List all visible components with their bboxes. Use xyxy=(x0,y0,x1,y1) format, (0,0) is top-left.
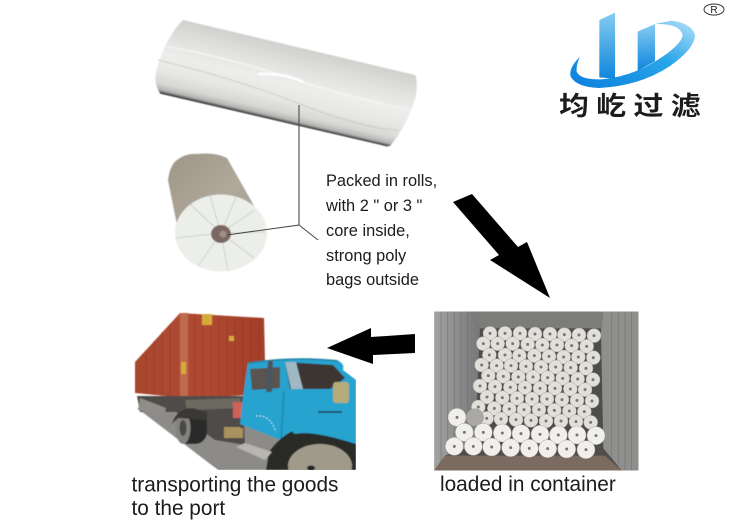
blue truck cab xyxy=(240,359,356,443)
ground xyxy=(137,408,280,470)
ceiling xyxy=(470,312,603,328)
logo mark xyxy=(570,13,695,88)
right wall xyxy=(601,312,638,470)
face pleats xyxy=(176,196,266,271)
registered mark: R xyxy=(710,5,718,16)
door pillar xyxy=(266,361,273,392)
mirror xyxy=(333,382,349,403)
wall ribs xyxy=(441,312,632,470)
company logo xyxy=(559,4,724,123)
rear wheels xyxy=(172,408,207,444)
packing description text: with 2 " or 3 " xyxy=(325,197,423,215)
windscreen xyxy=(285,362,345,389)
roll body xyxy=(168,154,262,262)
stacked rolls xyxy=(445,326,605,459)
container loading photo xyxy=(434,312,638,470)
truck caption: transporting the goods xyxy=(132,474,338,496)
side window xyxy=(250,367,280,390)
fender and wheel arch xyxy=(266,429,356,470)
trailer frame xyxy=(137,396,245,445)
registered mark xyxy=(704,4,724,16)
truck caption xyxy=(132,474,338,520)
cab step xyxy=(236,443,272,460)
logo Chinese name: 均屹过滤 xyxy=(559,86,708,123)
packing description text: strong poly xyxy=(326,247,407,265)
truck photo xyxy=(135,313,356,488)
left wall xyxy=(434,312,480,470)
container interior xyxy=(434,312,638,470)
arrow: container to truck xyxy=(327,328,415,364)
packing description text: bags outside xyxy=(326,271,419,289)
packing description text xyxy=(325,172,437,289)
red shipping container xyxy=(135,313,265,398)
roll end face xyxy=(175,194,267,272)
front wheel xyxy=(287,443,353,470)
container ribs xyxy=(146,314,244,396)
container caption: loaded in container xyxy=(440,473,616,496)
arrow: rolls to container xyxy=(453,194,550,298)
roll core xyxy=(211,225,231,243)
packing description text: Packed in rolls, xyxy=(326,172,437,190)
cab roof edge xyxy=(249,359,338,363)
door lines xyxy=(281,391,284,441)
leader lines xyxy=(227,105,318,240)
roll cores xyxy=(454,333,596,450)
packing description text: core inside, xyxy=(326,222,410,240)
small roll photo showing core xyxy=(168,154,267,272)
truck caption: to the port xyxy=(132,497,225,520)
floor xyxy=(434,456,622,470)
large wrapped roll photo xyxy=(156,20,417,146)
